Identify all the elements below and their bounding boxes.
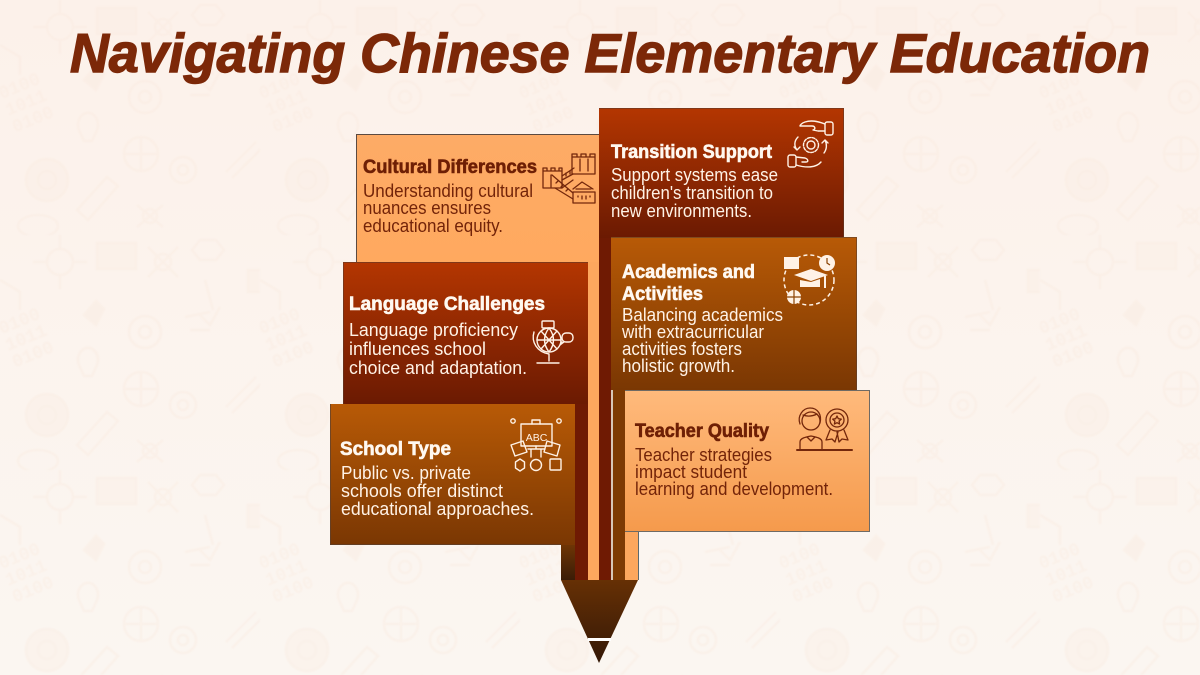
panel: language challenges xyxy=(343,262,588,404)
text: transition support xyxy=(611,164,778,221)
text: academics and activities: activities fosters xyxy=(622,338,742,359)
icon: graduation cap with book clock and ball xyxy=(784,255,835,305)
icon: globe with speech bubbles xyxy=(533,321,573,363)
text: transition support: Support systems ease xyxy=(611,164,778,185)
panel: school type xyxy=(330,404,575,545)
icon: teacher with award ribbon xyxy=(797,408,852,450)
pencil stem strips xyxy=(561,230,639,580)
text: academics and activities: Balancing academics xyxy=(622,304,783,325)
panel: transition support xyxy=(599,108,844,238)
text: school type: Public vs. private xyxy=(341,462,471,483)
text: teacher quality: impact student xyxy=(635,461,747,482)
text: teacher quality: Teacher strategies xyxy=(635,444,772,465)
text: teacher quality: learning and development. xyxy=(635,478,833,499)
icon: supportive hands with gear xyxy=(788,121,833,167)
pencil tip xyxy=(561,580,638,663)
title: Navigating Chinese Elementary Education xyxy=(70,22,1150,84)
icon: abc board with shapes: ABC xyxy=(526,432,548,444)
heading: language challenges: Language Challenges xyxy=(349,294,545,315)
text: cultural differences: educational equity. xyxy=(363,215,503,236)
text: school type: educational approaches. xyxy=(341,498,534,519)
pencil graphic xyxy=(561,230,639,663)
heading: teacher quality: Teacher Quality xyxy=(635,421,769,442)
icon: abc board with shapes xyxy=(511,419,561,471)
text: cultural differences: nuances ensures xyxy=(363,197,491,218)
text: academics and activities xyxy=(621,304,783,376)
heading: cultural differences: Cultural Differences xyxy=(363,157,537,178)
text: language challenges: Language proficiency xyxy=(349,319,519,340)
text: cultural differences xyxy=(363,180,533,236)
text: transition support: new environments. xyxy=(611,200,752,221)
text: academics and activities: holistic growth. xyxy=(622,355,735,376)
heading: academics and activities: Activities xyxy=(622,284,703,305)
text: language challenges xyxy=(349,319,527,378)
text: teacher quality xyxy=(635,444,833,499)
heading: academics and activities xyxy=(622,262,755,305)
icon: great wall xyxy=(543,154,595,203)
text: cultural differences: Understanding cultural xyxy=(363,180,533,201)
text: language challenges: choice and adaptation. xyxy=(349,357,527,378)
text: school type xyxy=(341,462,534,519)
heading: school type: School Type xyxy=(340,439,451,460)
text: transition support: children's transition to xyxy=(611,182,773,203)
panel: cultural differences xyxy=(356,134,599,262)
heading: academics and activities: Academics and xyxy=(622,262,755,283)
text: language challenges: influences school xyxy=(349,338,486,359)
panel: teacher quality xyxy=(625,390,870,532)
heading: transition support: Transition Support xyxy=(611,142,773,163)
text: academics and activities: with extracurricular xyxy=(621,321,764,342)
panel: academics and activities xyxy=(611,237,857,390)
text: school type: schools offer distinct xyxy=(341,480,503,501)
